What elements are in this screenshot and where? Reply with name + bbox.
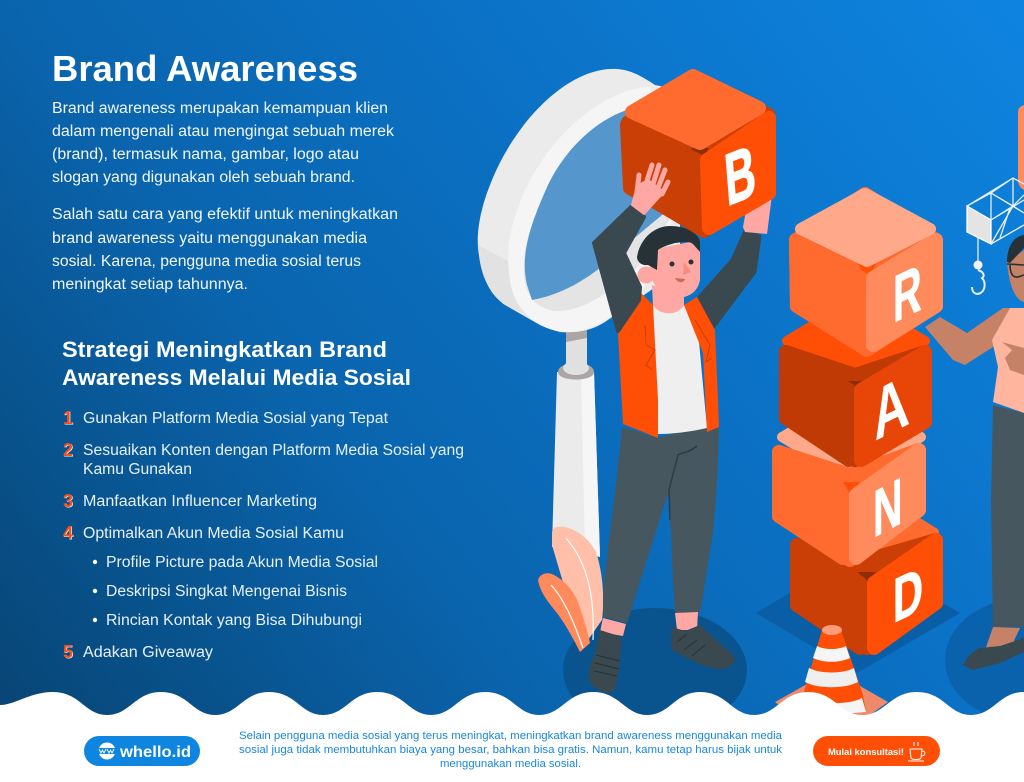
footer note: menggunakan media sosial. xyxy=(440,758,581,770)
intro paragraph 1: slogan yang digunakan oleh sebuah brand. xyxy=(52,169,355,186)
intro paragraph 2: Salah satu cara yang efektif untuk meningkatkan xyxy=(52,206,398,223)
cube N xyxy=(779,395,921,560)
socks xyxy=(600,612,698,636)
arm xyxy=(925,308,1024,365)
cube R: R xyxy=(893,249,922,337)
intro paragraph 2: meningkat setiap tahunnya. xyxy=(52,276,248,293)
trousers xyxy=(603,423,719,623)
footer note: sosial juga tidak membutuhkan biaya yang besar, bahkan bisa gratis. Namun, kamu tetap harus bijak untuk xyxy=(239,744,783,756)
strategy list: Sesuaikan Konten dengan Platform Media Sosial yang xyxy=(83,442,464,459)
left hand xyxy=(632,165,668,214)
icon: globe xyxy=(97,742,117,760)
intro paragraph 1: (brand), termasuk nama, gambar, logo atau xyxy=(52,146,359,163)
cube A: A xyxy=(869,361,912,457)
head xyxy=(650,240,700,298)
strategy heading: Awareness Melalui Media Sosial xyxy=(62,365,411,390)
consult button xyxy=(813,736,940,766)
intro paragraph 1 xyxy=(52,100,394,186)
list number 2: 2 xyxy=(63,440,73,460)
footer note xyxy=(239,730,783,770)
strategy list: Adakan Giveaway xyxy=(83,644,213,661)
intro paragraph 2: sosial. Karena, pengguna media sosial terus xyxy=(52,253,361,270)
icon: coffee cup xyxy=(908,742,925,761)
vest xyxy=(618,292,658,438)
cube stack D N A R xyxy=(779,194,936,648)
illustration: man body xyxy=(589,195,772,692)
strategy list xyxy=(63,408,464,663)
sub-bullets: Deskripsi Singkat Mengenai Bisnis xyxy=(106,583,347,600)
cube A xyxy=(786,300,925,460)
cube D xyxy=(797,490,936,648)
cube R xyxy=(796,194,936,350)
letter B: B xyxy=(722,129,758,222)
face details xyxy=(670,262,674,266)
list number 4: 4 xyxy=(63,523,73,543)
list number 5: 5 xyxy=(63,642,73,662)
cube B xyxy=(627,76,769,232)
list number 4: 4 xyxy=(64,524,74,544)
right arm xyxy=(699,231,760,328)
intro paragraph 2: brand awareness yaitu menggunakan media xyxy=(52,230,367,247)
right hand xyxy=(743,195,772,234)
glasses xyxy=(1007,264,1024,277)
sub-bullets: Rincian Kontak yang Bisa Dihubungi xyxy=(106,612,362,629)
consult button: Mulai konsultasi! xyxy=(828,747,904,758)
left arm xyxy=(594,207,644,331)
title: Brand Awareness xyxy=(52,48,358,89)
website badge: whello.id xyxy=(119,744,191,761)
hair xyxy=(1007,235,1024,263)
illustration: magnifying glass xyxy=(478,69,680,557)
website badge xyxy=(84,736,200,766)
shirt xyxy=(653,305,707,434)
cube N: N xyxy=(873,463,903,553)
intro paragraph 1: dalam mengenali atau mengingat sebuah merek xyxy=(52,123,394,140)
torso xyxy=(992,308,1024,413)
bottom wave and white footer band xyxy=(0,692,1024,782)
illustration: woman xyxy=(925,235,1024,670)
hair xyxy=(637,226,700,270)
list number 1: 1 xyxy=(64,409,74,429)
traffic cone xyxy=(775,625,888,722)
cube fragment right edge xyxy=(1018,105,1024,190)
pointing hand xyxy=(1002,342,1024,375)
strategy heading xyxy=(62,337,411,390)
strategy list: Manfaatkan Influencer Marketing xyxy=(83,493,317,510)
footer note: Selain pengguna media sosial yang terus meningkat, meningkatkan brand awareness menggunakan media xyxy=(239,730,783,742)
list number 2: 2 xyxy=(64,441,74,461)
illustration: leaves xyxy=(538,527,603,652)
shoe xyxy=(963,638,1024,670)
head xyxy=(1007,250,1024,302)
strategy list: Gunakan Platform Media Sosial yang Tepat xyxy=(83,410,389,427)
illustration: crane hook frame xyxy=(967,178,1024,294)
list number 5: 5 xyxy=(64,643,74,663)
intro paragraph 1: Brand awareness merupakan kemampuan klien xyxy=(52,100,388,117)
trousers xyxy=(991,405,1024,627)
list number 1: 1 xyxy=(63,408,73,428)
floor shadows xyxy=(563,553,1024,732)
illustration: man raised arm and hand xyxy=(594,165,668,331)
strategy list: Kamu Gunakan xyxy=(83,461,192,478)
strategy heading: Strategi Meningkatkan Brand xyxy=(62,337,387,362)
list number 3: 3 xyxy=(64,492,74,512)
list number 3: 3 xyxy=(63,491,73,511)
cube D: D xyxy=(893,553,923,637)
foot xyxy=(985,627,1020,650)
neck xyxy=(652,285,684,316)
sub-bullets xyxy=(93,554,378,629)
strategy list: Optimalkan Akun Media Sosial Kamu xyxy=(83,525,344,542)
shoes xyxy=(589,630,622,692)
sub-bullets: Profile Picture pada Akun Media Sosial xyxy=(106,554,378,571)
intro paragraph 2 xyxy=(52,206,398,293)
